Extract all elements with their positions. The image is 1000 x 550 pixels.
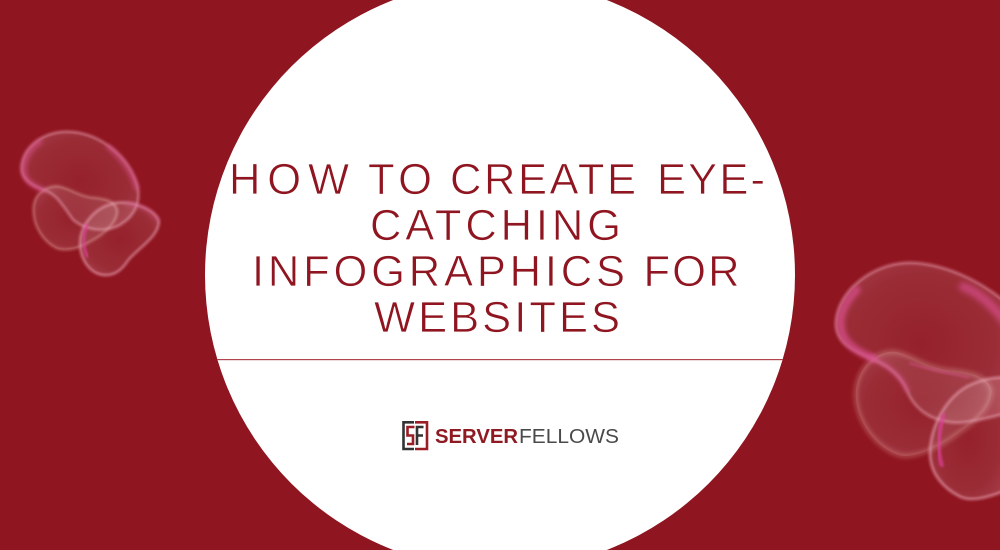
- logo icon: [404, 422, 427, 449]
- logo wordmark: [435, 426, 619, 448]
- title: CATCHING: [370, 202, 621, 250]
- logo: Server Fellows: [404, 422, 619, 449]
- title: EYE-: [657, 156, 765, 204]
- title: INFOGRAPHICS: [252, 248, 625, 296]
- logo wordmark: FELLOWS: [519, 426, 619, 448]
- title: TO: [368, 156, 432, 204]
- title: [229, 156, 765, 342]
- title: FOR: [644, 248, 740, 296]
- title: CREATE: [450, 156, 636, 204]
- bubble cluster: right: [836, 263, 1000, 499]
- title: WEBSITES: [374, 294, 620, 342]
- logo wordmark: SERVER: [435, 426, 519, 448]
- title: HOW: [229, 156, 349, 204]
- white circle panel: [205, 0, 795, 550]
- bubble cluster: left: [22, 132, 159, 275]
- divider: [217, 359, 783, 360]
